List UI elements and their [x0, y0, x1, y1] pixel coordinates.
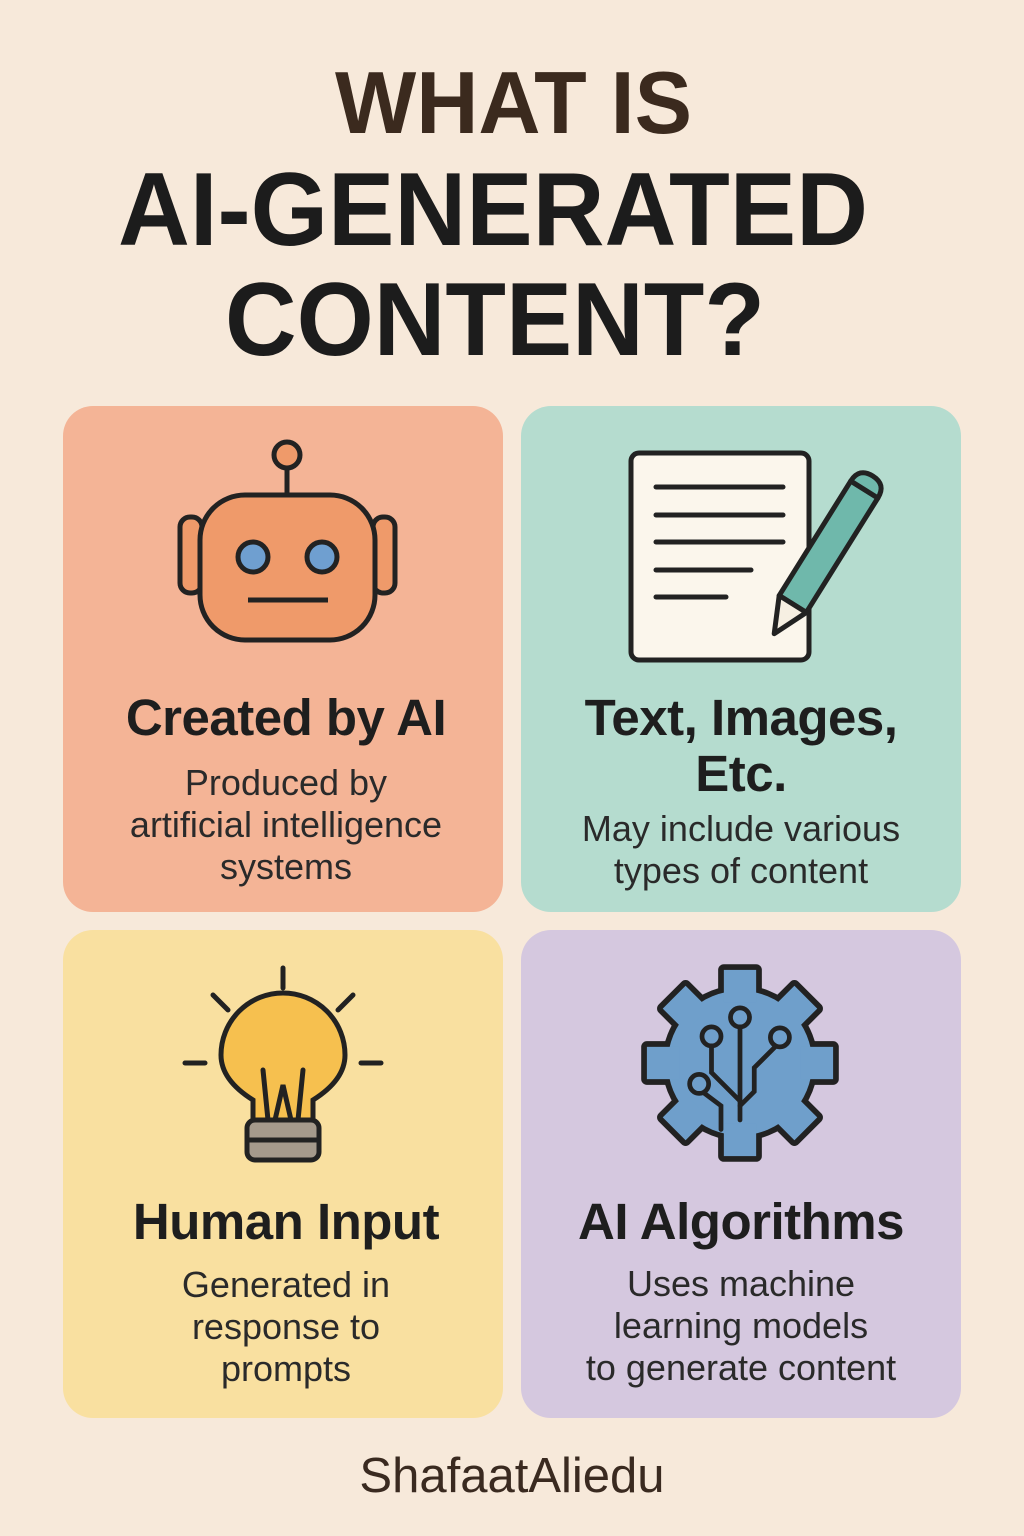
icon: robot	[178, 440, 398, 642]
text: May include various	[582, 808, 900, 849]
text: artificial intelligence	[130, 804, 442, 845]
heading: AI Algorithms	[578, 1193, 904, 1250]
text	[582, 808, 900, 891]
text: Uses machine	[627, 1263, 855, 1304]
text: types of content	[614, 850, 868, 891]
panel: AI algorithms	[521, 930, 961, 1418]
text: systems	[220, 846, 352, 887]
icon: gear circuit	[641, 964, 839, 1162]
text: response to	[192, 1306, 380, 1347]
title: CONTENT?	[225, 262, 765, 378]
heading: Created by AI	[126, 689, 446, 746]
text: prompts	[221, 1348, 351, 1389]
panel: human input	[63, 930, 503, 1418]
text: Generated in	[182, 1264, 390, 1305]
title: WHAT IS	[335, 53, 692, 152]
panel: created by AI	[63, 406, 503, 912]
heading: Text, Images,	[585, 689, 897, 746]
footer: ShafaatAliedu	[359, 1449, 665, 1503]
text	[182, 1264, 390, 1389]
heading	[585, 689, 897, 802]
icon: document and pencil	[628, 450, 884, 662]
text	[586, 1263, 896, 1388]
title	[118, 53, 868, 378]
heading: Etc.	[695, 745, 787, 802]
icon: light bulb	[182, 966, 384, 1162]
text: learning models	[614, 1305, 868, 1346]
text	[130, 762, 442, 887]
heading: Human Input	[133, 1193, 439, 1250]
title: AI-GENERATED	[118, 152, 868, 268]
text: to generate content	[586, 1347, 896, 1388]
text: Produced by	[185, 762, 387, 803]
panel: text images	[521, 406, 961, 912]
